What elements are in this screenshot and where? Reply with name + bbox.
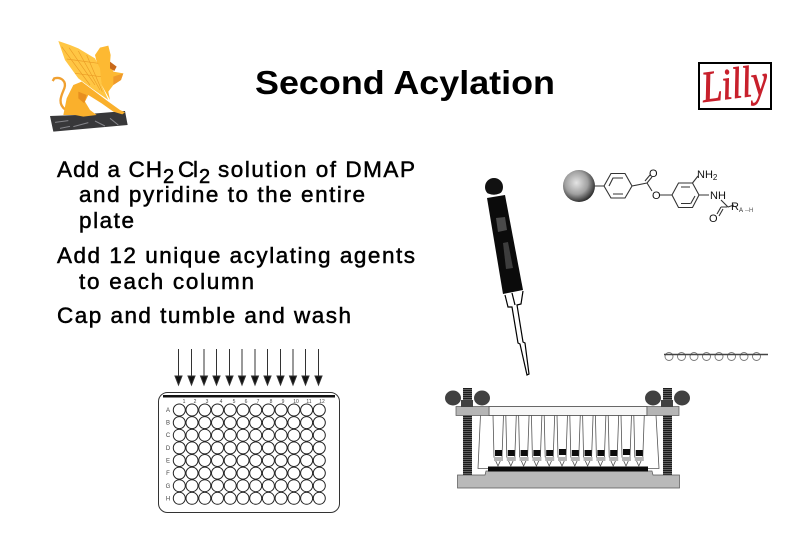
chemical structure: resin-bound intermediate <box>563 168 753 225</box>
chemical structure: resin-bound intermediate: O <box>649 168 658 180</box>
chemical structure: resin-bound intermediate: O <box>652 190 661 202</box>
text block: procedure steps: solution of DMAP <box>218 157 415 182</box>
text block: procedure steps: Add a CH <box>57 157 162 182</box>
text block: procedure steps: plate <box>79 208 134 233</box>
text block: procedure steps: and pyridine to the entire <box>79 182 365 207</box>
row letters: H <box>166 496 170 502</box>
text block: procedure steps: Add 12 unique acylating agents <box>57 243 415 268</box>
reaction block clamp apparatus <box>445 388 690 488</box>
96-well plate <box>158 392 340 512</box>
icon: golden griffin logo <box>50 41 128 132</box>
text block: procedure steps: to each column <box>79 269 254 294</box>
column numbers: 1 <box>183 399 186 405</box>
column numbers: 4 <box>220 399 223 405</box>
column numbers: 3 <box>206 399 209 405</box>
icon: Lilly logo: Lilly <box>698 55 771 112</box>
text block: procedure steps: 2 <box>199 166 210 188</box>
column numbers: 6 <box>245 399 248 405</box>
column numbers: 12 <box>319 399 325 405</box>
column numbers: 7 <box>257 399 260 405</box>
frits <box>494 457 644 461</box>
column numbers: 10 <box>293 399 299 405</box>
text block: procedure steps <box>57 157 415 328</box>
wing nuts <box>445 390 690 407</box>
chemical structure: resin-bound intermediate: A <box>739 208 743 214</box>
text block: procedure steps: 2 <box>163 166 174 188</box>
top plate <box>456 406 679 416</box>
row letters: A <box>166 408 170 414</box>
base plate <box>458 471 680 488</box>
title: Second Acylation <box>255 64 555 101</box>
resin plugs <box>495 449 643 456</box>
row letters: F <box>166 471 170 477</box>
icon: bead strip <box>664 352 768 360</box>
row letters: D <box>166 446 171 452</box>
wells <box>173 404 325 504</box>
arrows: twelve column additions <box>175 349 322 385</box>
reaction tubes <box>493 415 644 466</box>
chemical structure: resin-bound intermediate: 2 <box>713 173 718 182</box>
outer housing <box>478 415 659 468</box>
chemical structure: resin-bound intermediate: R <box>731 201 739 213</box>
row letters: E <box>166 458 170 464</box>
chemical structure: resin-bound intermediate: NH <box>710 190 726 202</box>
row letters: G <box>166 484 171 490</box>
column numbers <box>183 399 325 405</box>
column numbers: 8 <box>270 399 273 405</box>
text block: procedure steps: Cap and tumble and wash <box>57 303 351 328</box>
row letters <box>166 408 171 502</box>
row letters: C <box>166 433 171 439</box>
threaded screws <box>463 388 672 475</box>
icon: multichannel pipette <box>485 178 529 375</box>
row letters: B <box>166 420 170 426</box>
chemical structure: resin-bound intermediate: O <box>709 213 718 225</box>
chemical structure: resin-bound intermediate: NH <box>697 169 713 181</box>
column numbers: 11 <box>306 399 312 405</box>
column numbers: 2 <box>194 399 197 405</box>
chemical structure: resin-bound intermediate: --H <box>745 208 753 214</box>
text block: procedure steps: Cl <box>178 157 198 182</box>
column numbers: 9 <box>282 399 285 405</box>
column numbers: 5 <box>233 399 236 405</box>
